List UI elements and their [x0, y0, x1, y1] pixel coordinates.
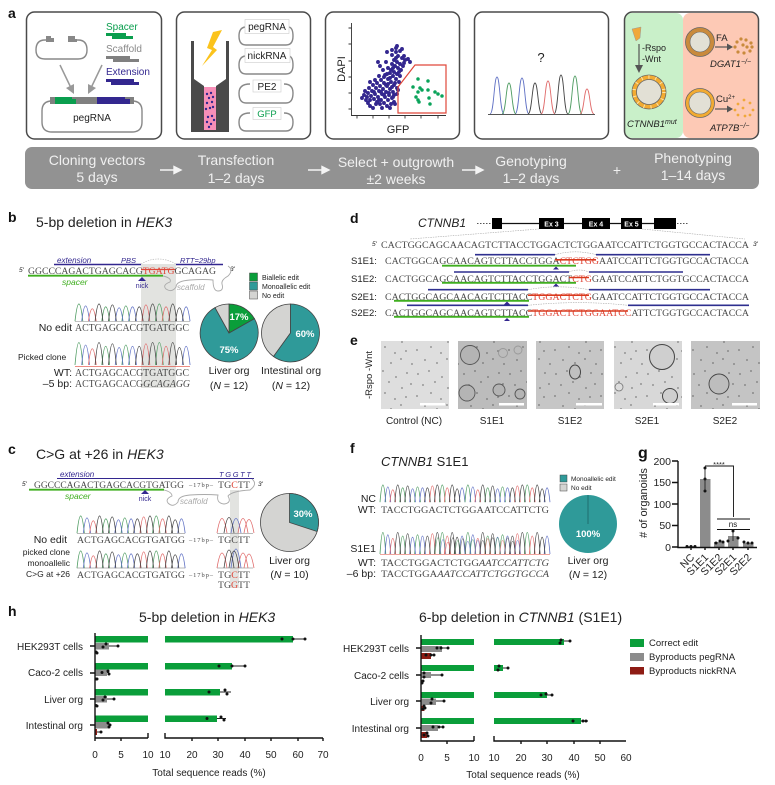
chart: 6-bp deletion in CTNNB1: 5 — [444, 753, 450, 764]
chart: 5-bp deletion in HEK3: 10 — [142, 750, 154, 761]
chart: 6-bp deletion in CTNNB1: 10 — [468, 753, 480, 764]
timeline bar: Genotyping — [495, 153, 567, 169]
micrograph S2E2 — [691, 341, 760, 427]
x-axis category labels: NC — [678, 551, 697, 571]
micrograph S1E2 — [536, 341, 604, 427]
panel label f: f — [350, 440, 355, 456]
data points and significance brackets: **** — [713, 460, 725, 469]
sequence diagram b: scaffold — [177, 283, 205, 292]
guide S2E1: S2E1: — [351, 292, 377, 303]
heading c: C>G at +26 in HEK3 — [36, 446, 164, 462]
chart: 5-bp deletion in HEK3: 0 — [92, 750, 98, 761]
pie: intestinal org: 60% — [295, 329, 315, 340]
reference sequence: 3' — [753, 241, 759, 248]
box: phenotyping organoids: Cu — [716, 94, 728, 105]
chromatogram no edit — [39, 304, 190, 334]
reference sequence: 5' — [372, 241, 378, 248]
legend b: No edit — [262, 293, 284, 300]
chart: 5-bp deletion in HEK3 — [17, 609, 329, 779]
panel f: CTNNB1 S1E1 — [347, 440, 617, 581]
chart: 6-bp deletion in CTNNB1: 60 — [620, 753, 632, 764]
chart: 6-bp deletion in CTNNB1: 0 — [418, 753, 424, 764]
box: phenotyping organoids: DGAT1 — [710, 59, 741, 70]
x-axis category labels: S2E1 — [712, 552, 739, 578]
panel c: C>G at +26 in HEK3 — [8, 441, 319, 591]
chart: 6-bp deletion in CTNNB1: Total sequence reads (%) — [466, 770, 580, 781]
x-axis category labels: S1E1 — [684, 552, 711, 578]
box: phenotyping organoids: -Wnt — [642, 54, 661, 64]
guide S2E2 — [351, 303, 749, 321]
chart: 6-bp deletion in CTNNB1: 6-bp deletion in CTNNB1 (S1E1) — [419, 609, 622, 625]
chart: 6-bp deletion in CTNNB1: 20 — [515, 753, 527, 764]
axes: 200 — [653, 456, 671, 468]
sequence diagram b: 3' — [230, 266, 236, 273]
legend b: Biallelic edit — [262, 275, 299, 282]
chromatogram monoallelic clone c: ACTGAGCACGTGATGG — [77, 571, 185, 581]
y-axis title: # of organoids — [638, 468, 650, 538]
panel b: 5-bp deletion in HEK3 — [8, 209, 321, 392]
legend f: No edit — [571, 485, 592, 492]
box: transfection schematic: pegRNA — [248, 22, 286, 33]
box: cloning vectors schematic — [26, 12, 162, 139]
pie: liver org f: Liver org — [568, 555, 609, 567]
sequence diagram c: scaffold — [180, 497, 208, 506]
chart: 5-bp deletion in HEK3: 20 — [186, 750, 198, 761]
chromatogram no edit c: –17bp– — [188, 537, 214, 544]
micrograph control: Control (NC) — [386, 416, 442, 427]
legend f — [560, 475, 616, 492]
chromatogram picked clone: ACTGAGCACGGCAGAGG — [75, 379, 190, 390]
chromatogram no edit c: ACTGAGCACGTGATGG — [77, 536, 185, 546]
chart: 5-bp deletion in HEK3: 10 — [159, 750, 171, 761]
x-axis category labels — [678, 551, 754, 578]
chart: 6-bp deletion in CTNNB1: Caco-2 cells — [354, 671, 409, 682]
chromatogram S1E1: TACCTGGACTCTGG AATCCATTCTG — [381, 559, 549, 569]
chromatogram monoallelic clone c: C>G at +26 — [26, 569, 70, 579]
chromatogram NC: NC — [361, 493, 376, 505]
guide S2E2: CACTGGCAGCAACAGTCTTACC TGGACTCTGGAATCC ATTCTGGTGCCACTACCA — [385, 309, 749, 319]
micrograph S2E1 — [614, 341, 682, 427]
box: transfection schematic — [176, 12, 310, 139]
sequence diagram c: nick — [139, 496, 152, 503]
pie: intestinal org: Intestinal org — [261, 365, 321, 377]
box: transfection schematic: nickRNA — [248, 51, 287, 62]
chart: 5-bp deletion in HEK3: Caco-2 cells — [28, 668, 83, 679]
box: phenotyping organoids — [624, 12, 758, 139]
guide S2E1 — [351, 287, 749, 304]
box: transfection schematic: GFP — [257, 109, 277, 120]
box: phenotyping organoids: ATP7B — [710, 123, 739, 134]
condition label: -Rspo -Wnt — [364, 351, 375, 399]
box: Sanger chromatogram — [474, 12, 608, 139]
guide S1E1 — [351, 252, 749, 270]
sequence diagram c: spacer — [65, 491, 92, 501]
chromatogram S1E1: –6 bp: — [347, 568, 376, 580]
box: phenotyping organoids: mut — [665, 119, 678, 126]
data points and significance brackets: ns — [729, 520, 737, 529]
timeline bar: Transfection — [198, 152, 274, 168]
gene map: Ex 5 — [624, 222, 639, 228]
data points and significance brackets — [687, 460, 752, 546]
chromatogram monoallelic clone c: picked clone — [23, 547, 70, 557]
chromatogram S1E1: S1E1 — [350, 543, 376, 555]
legend f: Monoallelic edit — [571, 476, 616, 483]
axes — [653, 456, 757, 554]
chart: 5-bp deletion in HEK3: 70 — [317, 750, 329, 761]
sequence diagram c: GGCCCAGACTGAGCACGTGATGG — [34, 481, 184, 491]
pie: liver org f — [559, 495, 617, 581]
panel label h: h — [8, 603, 17, 619]
chromatogram monoallelic clone c: –17bp– — [188, 572, 214, 579]
guide S2E2: S2E2: — [351, 308, 377, 319]
box: phenotyping organoids: −/− — [741, 59, 751, 66]
gene map: CTNNB1 — [418, 216, 466, 230]
panel label e: e — [350, 332, 358, 348]
sequence diagram c: TGGTT — [219, 470, 252, 479]
panel label d: d — [350, 210, 359, 226]
sequence diagram b: PBS — [121, 256, 136, 265]
chromatogram monoallelic clone c: TGCTT — [218, 571, 250, 581]
chromatogram no edit c: TGCTT — [218, 536, 250, 546]
chromatogram S1E1: WT: — [358, 557, 376, 569]
chromatogram no edit: ACTGAGCACGTGATGGC — [75, 323, 189, 334]
guide S2E1: CACTGGCAGCAACAGTCTTACC TGGACTCTGGAATCCATTCTGGTGCCACTACCA — [385, 293, 749, 303]
timeline bar: 1–2 days — [503, 170, 559, 186]
pie: liver org: 75% — [219, 345, 239, 356]
micrograph S1E1 — [458, 341, 527, 427]
chromatogram NC: WT: — [358, 504, 376, 516]
guide S1E1: CACTGGCAGCAACAGTCTTACCTGGA CTCTGGAATCCATTCTGGTGCCACTACCA — [385, 257, 749, 267]
panel d: CTNNB1 target sequences — [350, 210, 759, 321]
panel label g: g — [638, 445, 648, 462]
chart: 5-bp deletion in HEK3: 5 — [118, 750, 124, 761]
pie: liver org f: 100% — [576, 529, 601, 540]
pie: intestinal org — [261, 304, 321, 392]
box: phenotyping organoids: -Rspo — [642, 43, 666, 53]
shaded deletion column — [141, 264, 176, 388]
chromatogram picked clone: ACTGAGCACGTGATGGC — [75, 368, 189, 379]
chart: 6-bp deletion in CTNNB1: Intestinal org — [352, 724, 409, 735]
axes: 100 — [653, 499, 671, 511]
chart: 6-bp deletion in CTNNB1: 40 — [568, 753, 580, 764]
chart: 6-bp deletion in CTNNB1: 10 — [488, 753, 500, 764]
guide S1E1: S1E1: — [351, 256, 377, 267]
timeline bar: + — [613, 162, 621, 178]
chromatogram monoallelic clone c — [23, 547, 254, 591]
box: cloning vectors schematic: Spacer — [106, 22, 138, 33]
panel label c: c — [8, 441, 16, 457]
legend b: Monoallelic edit — [262, 284, 310, 291]
legend h: Byproducts pegRNA — [649, 652, 736, 663]
x-axis category labels: S1E2 — [698, 552, 725, 578]
sequence diagram b: RTT=29bp — [180, 256, 216, 265]
heading b: 5-bp deletion in HEK3 — [36, 214, 172, 230]
timeline bar: ±2 weeks — [366, 171, 426, 187]
gene map: Ex 4 — [589, 222, 603, 228]
box: FACS scatter plot: DAPI — [336, 56, 348, 82]
micrograph control — [381, 341, 449, 427]
gene map: Ex 3 — [544, 222, 559, 228]
panel label a: a — [8, 5, 16, 21]
chart: 6-bp deletion in CTNNB1: Liver org — [370, 697, 409, 708]
chromatogram no edit c — [34, 516, 254, 546]
sequence diagram c: extension — [60, 470, 95, 479]
sequence diagram c: –17bp– — [188, 482, 214, 489]
panel h: sequence read charts — [8, 603, 737, 781]
guide S1E2 — [351, 270, 749, 286]
timeline bar — [25, 147, 759, 189]
pie: liver org: 17% — [229, 312, 249, 323]
pie: intestinal org: (N = 12) — [272, 380, 310, 392]
box: phenotyping organoids: CTNNB1 — [627, 119, 665, 130]
chart: 5-bp deletion in HEK3: 5-bp deletion in HEK3 — [139, 609, 275, 625]
sequence diagram b: GGCCCAGACTGAGCACGTGATGGCAGAG — [28, 267, 216, 277]
chromatogram picked clone: WT: — [54, 367, 72, 379]
sequence diagram b: nick — [136, 283, 149, 290]
pie: liver org: Liver org — [209, 365, 250, 377]
micrograph S1E2: S1E2 — [558, 416, 583, 427]
sequence diagram c: 3' — [258, 481, 264, 488]
timeline bar: 1–2 days — [208, 170, 264, 186]
pie: liver org c: 30% — [293, 509, 313, 520]
box: cloning vectors schematic: Scaffold — [106, 44, 142, 55]
chromatogram picked clone — [18, 342, 190, 390]
pie: liver org: (N = 12) — [210, 380, 248, 392]
panel a: workflow — [8, 5, 759, 189]
micrograph S2E2: S2E2 — [713, 416, 738, 427]
heading f: CTNNB1 S1E1 — [381, 454, 468, 469]
box: cloning vectors schematic: pegRNA — [73, 113, 111, 124]
timeline bar: 5 days — [76, 169, 118, 185]
box: phenotyping organoids: −/− — [739, 123, 750, 130]
bars — [686, 479, 754, 547]
pie: liver org — [200, 304, 258, 392]
legend h: Byproducts nickRNA — [649, 666, 737, 677]
micrograph S1E1: S1E1 — [480, 416, 505, 427]
chromatogram monoallelic clone c: monoallelic — [27, 558, 71, 568]
chart: 5-bp deletion in HEK3: 30 — [212, 750, 224, 761]
chromatogram picked clone: Picked clone — [18, 352, 66, 362]
panel label b: b — [8, 209, 17, 225]
guide S1E2: CACTGGCAGCAACAGTCTTACCTGGACT CTGGAATCCATTCTGGTGCCACTACCA — [385, 275, 749, 285]
legend b — [250, 273, 310, 300]
chart: 5-bp deletion in HEK3: 50 — [265, 750, 277, 761]
timeline bar: 1–14 days — [661, 167, 725, 183]
chart: 6-bp deletion in CTNNB1: HEK293T cells — [343, 644, 409, 655]
sequence diagram c — [22, 470, 264, 506]
timeline bar: Select + outgrowth — [338, 154, 454, 170]
timeline bar: Cloning vectors — [49, 152, 145, 168]
pie: liver org c — [260, 493, 319, 581]
reference sequence: CACTGGCAGCAACAGTCTTACCTGGACTCTGGAATCCATTCTGGTGCCACTACCA — [381, 241, 749, 251]
legend h: Correct edit — [649, 638, 698, 649]
box: FACS scatter plot — [326, 12, 460, 139]
chromatogram NC — [358, 485, 550, 516]
chart: 5-bp deletion in HEK3: HEK293T cells — [17, 642, 83, 653]
chart: 5-bp deletion in HEK3: 60 — [292, 750, 304, 761]
pie: liver org c: (N = 10) — [270, 569, 309, 581]
sequence diagram c: 5' — [22, 481, 28, 488]
chromatogram no edit: No edit — [39, 322, 72, 334]
sequence diagram b: spacer — [62, 277, 89, 287]
panel g: organoid count bar chart — [638, 445, 757, 578]
box: FACS scatter plot: GFP — [387, 124, 409, 136]
box: Sanger chromatogram: ? — [537, 50, 545, 65]
chart: 6-bp deletion in CTNNB1: 30 — [541, 753, 553, 764]
panel e: organoid micrographs — [350, 332, 760, 427]
gene map — [410, 216, 745, 239]
axes: 150 — [653, 477, 671, 489]
shaded edit column — [230, 490, 239, 588]
pie: liver org f: (N = 12) — [569, 569, 607, 581]
chart: 6-bp deletion in CTNNB1: 50 — [594, 753, 606, 764]
chromatogram no edit c: No edit — [34, 534, 67, 546]
chromatogram S1E1: TACCTGGA AATCCATTCTGGTGCCA — [381, 570, 549, 580]
x-axis category labels: S2E2 — [727, 552, 754, 578]
chart: 5-bp deletion in HEK3: 40 — [239, 750, 251, 761]
chromatogram monoallelic clone c: TGGTT — [218, 581, 250, 591]
timeline bar: Phenotyping — [654, 150, 732, 166]
box: phenotyping organoids: FA — [716, 33, 728, 44]
chart: 6-bp deletion in CTNNB1 — [343, 609, 632, 781]
axes: 0 — [665, 542, 671, 554]
sequence diagram c: TGCTT — [218, 481, 250, 491]
sequence diagram b: 5' — [19, 267, 25, 274]
guide S1E2: S1E2: — [351, 274, 377, 285]
chromatogram picked clone: –5 bp: — [43, 378, 72, 390]
chart: 5-bp deletion in HEK3: Intestinal org — [26, 721, 83, 732]
box: cloning vectors schematic: Extension — [106, 67, 150, 78]
box: transfection schematic: PE2 — [258, 82, 277, 93]
chromatogram NC: TACCTGGACTCTGGAATCCATTCTG — [381, 506, 549, 516]
chart: 5-bp deletion in HEK3: Total sequence reads (%) — [152, 768, 266, 779]
axes: 50 — [659, 520, 671, 532]
chart: 5-bp deletion in HEK3: Liver org — [44, 695, 83, 706]
box: phenotyping organoids: 2+ — [728, 95, 735, 101]
micrograph S2E1: S2E1 — [635, 416, 660, 427]
sequence diagram b: extension — [57, 256, 92, 265]
sequence diagram b — [19, 256, 236, 292]
chromatogram S1E1 — [347, 532, 550, 580]
legend h — [630, 638, 737, 677]
pie: liver org c: Liver org — [269, 555, 310, 567]
